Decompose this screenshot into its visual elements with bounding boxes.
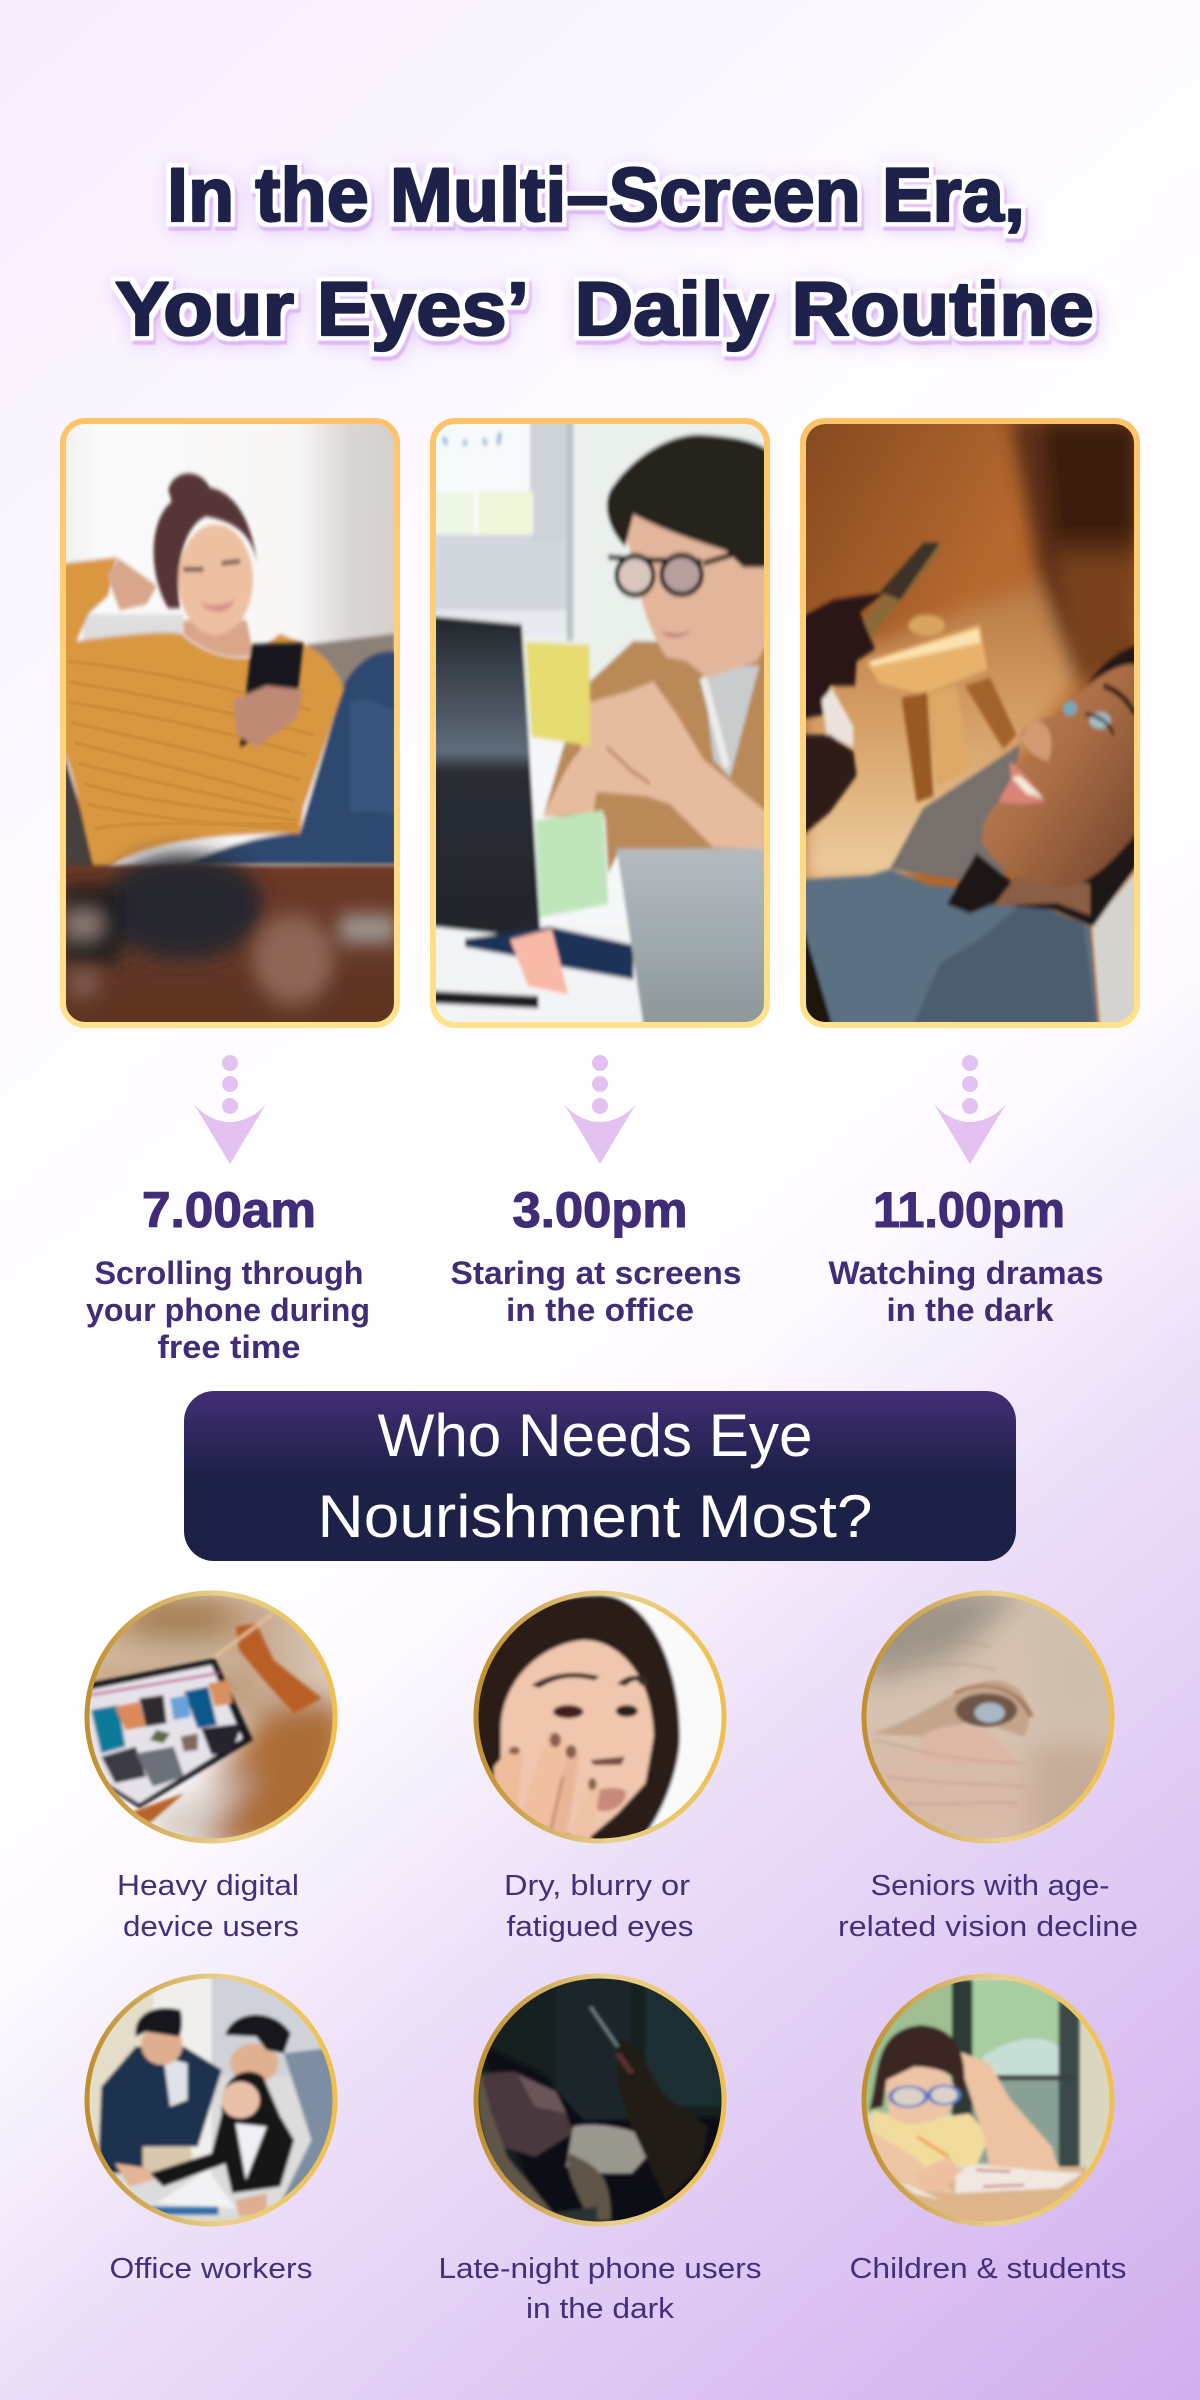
caption: in the dark bbox=[526, 2293, 675, 2325]
ring bbox=[87, 1593, 335, 1841]
caption: Seniors with age- bbox=[870, 1870, 1110, 1902]
caption bbox=[438, 2253, 762, 2325]
title: Your Eyes’ Daily Routine bbox=[115, 267, 1094, 352]
time block: 11.00pm: 11.00pm bbox=[873, 1182, 1065, 1238]
ring bbox=[87, 1976, 335, 2224]
caption bbox=[504, 1870, 694, 1943]
photo border bbox=[433, 421, 767, 1025]
ring bbox=[476, 1593, 724, 1841]
time block: 3.00pm: in the office bbox=[506, 1292, 694, 1328]
time block: 3.00pm: 3.00pm bbox=[512, 1182, 688, 1238]
time block: 11.00pm: Watching dramas bbox=[828, 1255, 1104, 1291]
title: In the Multi–Screen Era, bbox=[167, 153, 1025, 238]
caption: Heavy digital bbox=[117, 1870, 299, 1902]
time block: 7.00am: Scrolling through bbox=[94, 1255, 364, 1291]
group: heavy digital device users bbox=[84, 1590, 338, 1936]
caption: fatigued eyes bbox=[506, 1911, 694, 1943]
caption: Children & students bbox=[850, 2253, 1126, 2285]
banner heading bbox=[184, 1391, 1016, 1561]
panel: morning photo bbox=[63, 420, 397, 1029]
time block: 7.00am: 7.00am bbox=[142, 1182, 316, 1238]
caption: device users bbox=[123, 1911, 299, 1943]
caption bbox=[117, 1870, 299, 1943]
title bbox=[115, 153, 1094, 352]
caption: Office workers bbox=[110, 2253, 312, 2285]
time block: 11.00pm: in the dark bbox=[886, 1292, 1054, 1328]
group: children and students bbox=[850, 1970, 1127, 2285]
time block: 3.00pm bbox=[450, 1182, 742, 1328]
caption: related vision decline bbox=[838, 1911, 1138, 1943]
group: dry, blurry or fatigued eyes bbox=[466, 1587, 742, 1943]
banner heading: Who Needs Eye bbox=[378, 1402, 812, 1469]
caption bbox=[838, 1870, 1138, 1943]
banner heading: Nourishment Most? bbox=[318, 1483, 872, 1550]
arrow: morning bbox=[194, 1055, 266, 1164]
group: seniors with age-related vision decline bbox=[838, 1587, 1138, 1943]
time block: 3.00pm: Staring at screens bbox=[450, 1255, 742, 1291]
panel: afternoon photo bbox=[433, 420, 767, 1031]
arrow: afternoon bbox=[564, 1055, 636, 1164]
caption: Late-night phone users bbox=[438, 2253, 762, 2285]
ring bbox=[476, 1976, 724, 2224]
time block: 7.00am bbox=[86, 1182, 370, 1365]
time block: 7.00am: free time bbox=[158, 1329, 300, 1365]
time block: 11.00pm bbox=[828, 1182, 1104, 1328]
photo border bbox=[803, 421, 1137, 1025]
time block: 7.00am: your phone during bbox=[86, 1292, 370, 1328]
group: office workers bbox=[84, 1974, 338, 2278]
arrow: night bbox=[934, 1055, 1006, 1164]
ring bbox=[864, 1593, 1112, 1841]
panel: night photo bbox=[803, 416, 1140, 1029]
ring bbox=[864, 1976, 1112, 2224]
photo border bbox=[63, 421, 397, 1025]
group: late-night phone users in the dark bbox=[438, 1970, 762, 2325]
caption: Dry, blurry or bbox=[504, 1870, 690, 1902]
